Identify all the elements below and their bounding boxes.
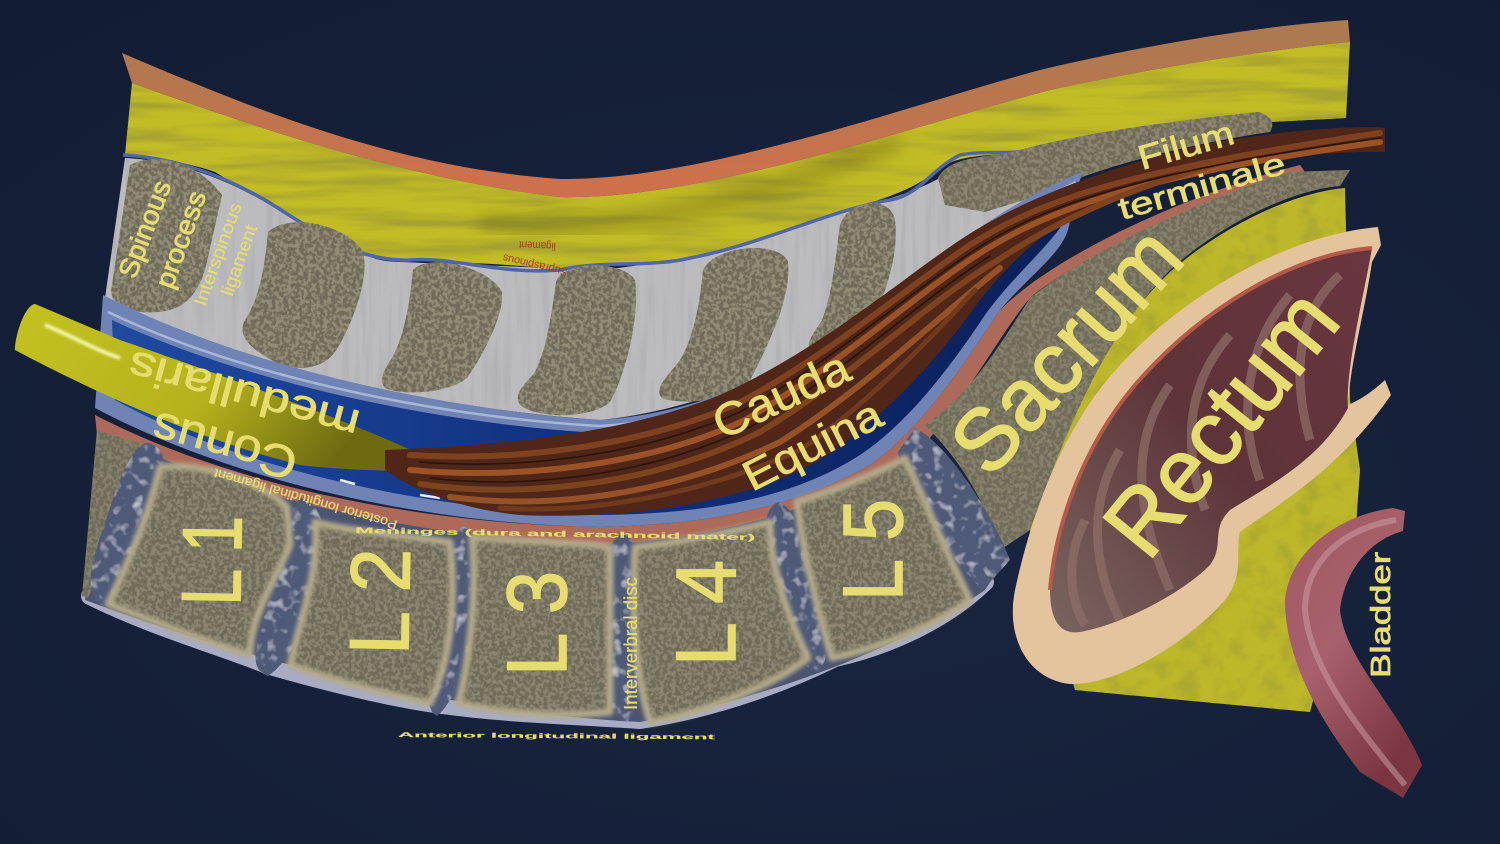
label: supraspinous ligament: Supraspinous xyxy=(501,251,569,278)
rectum xyxy=(1013,227,1391,684)
label: intervertebral disc: Interverbral disc xyxy=(621,577,641,710)
label: vertebrae L1 to L5: L 3 xyxy=(490,571,584,676)
cord body xyxy=(15,304,415,472)
label: cauda equina: Equina xyxy=(735,390,890,500)
label: filum terminale: terminale xyxy=(1114,146,1289,227)
label: conus medullaris: medullaris xyxy=(123,342,364,449)
label: bladder: Bladder xyxy=(1365,552,1396,678)
label: sacrum: Sacrum xyxy=(931,207,1202,493)
fluid highlights xyxy=(280,455,480,501)
subcutaneous fat, upper xyxy=(125,42,1350,270)
label: cauda equina: Cauda xyxy=(704,340,858,449)
fat layer xyxy=(125,42,1350,270)
upper inner membrane xyxy=(108,182,1076,426)
rectal wall xyxy=(1013,227,1391,684)
label: filum terminale xyxy=(1114,114,1289,227)
label: vertebrae L1 to L5: L 1 xyxy=(164,515,260,606)
intervertebral discs xyxy=(91,428,1010,722)
label: posterior longitudinal ligament: Posterior longitudinal ligament xyxy=(212,466,399,533)
cauda equina xyxy=(385,127,1385,516)
label: spinous process: Spinous xyxy=(113,176,177,282)
inner lip xyxy=(1050,248,1372,590)
label: meninges: Meninges (dura and arachnoid mater) xyxy=(355,526,755,542)
meninges band xyxy=(95,165,1305,548)
fat dark band xyxy=(480,140,900,226)
label: vertebrae L1 to L5: L 2 xyxy=(332,548,428,655)
spinous processes xyxy=(111,159,896,415)
lumen xyxy=(1050,248,1372,632)
sacrum xyxy=(925,170,1350,550)
bladder xyxy=(1285,508,1422,798)
coccyx bone xyxy=(938,112,1272,212)
bladder wall xyxy=(1285,508,1422,798)
label: interspinous ligament xyxy=(190,200,261,308)
labels xyxy=(113,114,1396,741)
label: supraspinous ligament xyxy=(501,238,569,278)
conus medullaris xyxy=(15,304,415,472)
interspinous ligament tissue xyxy=(105,158,1040,420)
mucosal folds xyxy=(1072,275,1340,625)
label: interspinous ligament: Interspinous xyxy=(190,200,246,308)
vertebra spongy bone xyxy=(108,458,970,722)
skin xyxy=(122,20,1350,197)
label: interspinous ligament: ligament xyxy=(217,222,261,298)
nerve strands xyxy=(410,133,1380,509)
label: vertebrae L1 to L5: L 5 xyxy=(826,499,920,601)
vertebra rims xyxy=(108,458,970,722)
label: vertebrae L1 to L5: L 4 xyxy=(659,560,753,666)
label: cauda equina xyxy=(704,340,890,500)
nerve bundle xyxy=(385,127,1385,516)
anterior longitudinal ligament band xyxy=(90,582,985,720)
left partial vertebra xyxy=(82,430,142,598)
label: spinous process xyxy=(113,176,212,292)
label: supraspinous ligament: ligament xyxy=(519,238,556,252)
label: vertebrae L1 to L5 xyxy=(164,499,920,676)
supraspinous ligament line xyxy=(123,150,1030,271)
pelvic fat xyxy=(1030,188,1360,712)
label: conus medullaris xyxy=(123,342,364,491)
label: conus medullaris: Conus xyxy=(146,402,303,491)
label: filum terminale: Filum xyxy=(1134,114,1238,178)
cerebrospinal fluid xyxy=(112,190,1070,515)
label: anterior longitudinal ligament: Anterior longitudinal ligament xyxy=(398,731,715,741)
highlight xyxy=(45,325,120,358)
outer dura xyxy=(95,172,1082,527)
label: spinous process: process xyxy=(149,187,212,292)
vertebral column backing xyxy=(85,430,1005,722)
muscle layers xyxy=(1305,520,1405,785)
thecal sac xyxy=(95,172,1082,527)
label: rectum: Rectum xyxy=(1084,270,1359,576)
vertebrae xyxy=(108,458,970,722)
